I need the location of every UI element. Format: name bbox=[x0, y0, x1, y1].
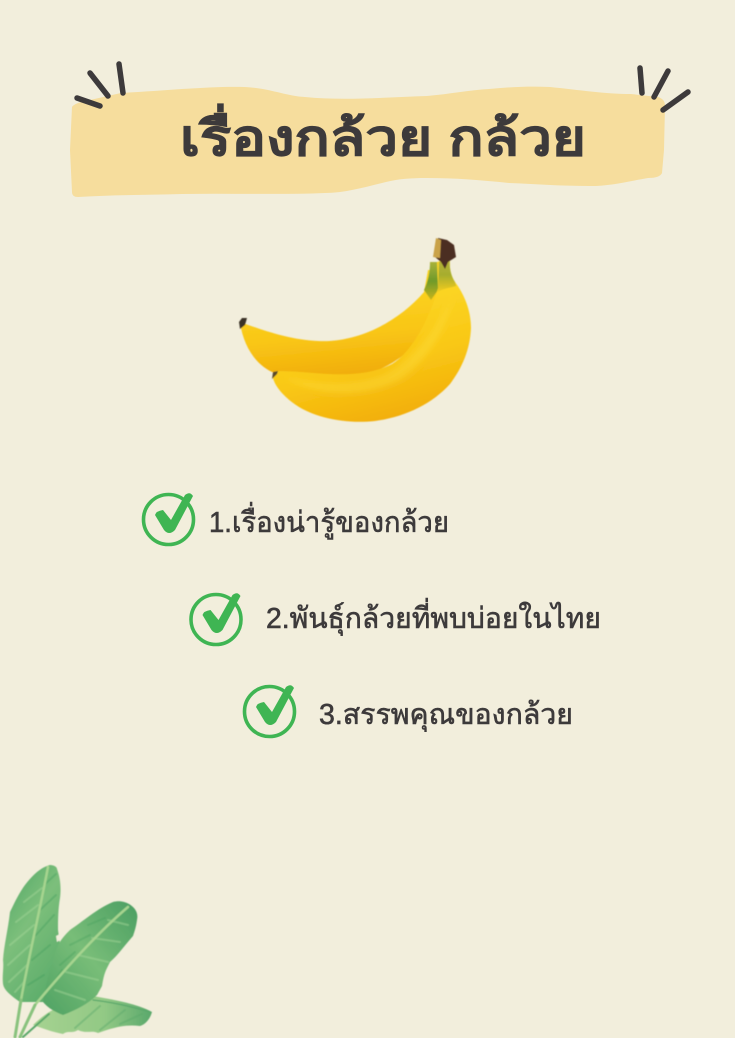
banana illustration bbox=[239, 238, 471, 422]
front banana tip bbox=[272, 371, 278, 379]
front banana bbox=[273, 258, 471, 422]
back banana bbox=[240, 270, 444, 378]
title text: เรื่องกล้วย กล้วย bbox=[180, 103, 586, 166]
right burst marks bbox=[640, 68, 688, 110]
back banana stem bbox=[424, 262, 441, 300]
leaf notch bbox=[56, 934, 60, 942]
left burst marks bbox=[77, 64, 123, 106]
banana leaves bbox=[3, 865, 152, 1037]
front leaf bbox=[43, 901, 137, 1015]
icon: check 3 bbox=[244, 685, 294, 736]
midribs and stems bbox=[15, 867, 150, 1037]
front banana stem bbox=[438, 258, 456, 292]
front banana highlight bbox=[285, 295, 452, 393]
label 2: 2.พันธุ์กล้วยที่พบบ่อยในไทย bbox=[266, 598, 601, 636]
leaf veins bbox=[8, 874, 142, 1030]
label 3: 3.สรรพคุณของกล้วย bbox=[319, 699, 573, 732]
checklist bbox=[144, 493, 601, 736]
icon: check 1 bbox=[144, 493, 194, 544]
lower leaf bbox=[33, 996, 152, 1034]
crown light edge bbox=[433, 238, 441, 258]
banana crown bbox=[435, 238, 456, 269]
banner shape bbox=[70, 87, 665, 197]
title banner bbox=[70, 64, 688, 197]
label 1: 1.เรื่องน่ารู้ของกล้วย bbox=[209, 502, 449, 540]
item 2 bbox=[191, 593, 601, 644]
item 1 bbox=[144, 493, 449, 544]
icon: check 2 bbox=[191, 593, 241, 644]
back banana tip bbox=[239, 318, 247, 329]
back leaf bbox=[3, 865, 61, 1002]
item 3 bbox=[244, 685, 573, 736]
